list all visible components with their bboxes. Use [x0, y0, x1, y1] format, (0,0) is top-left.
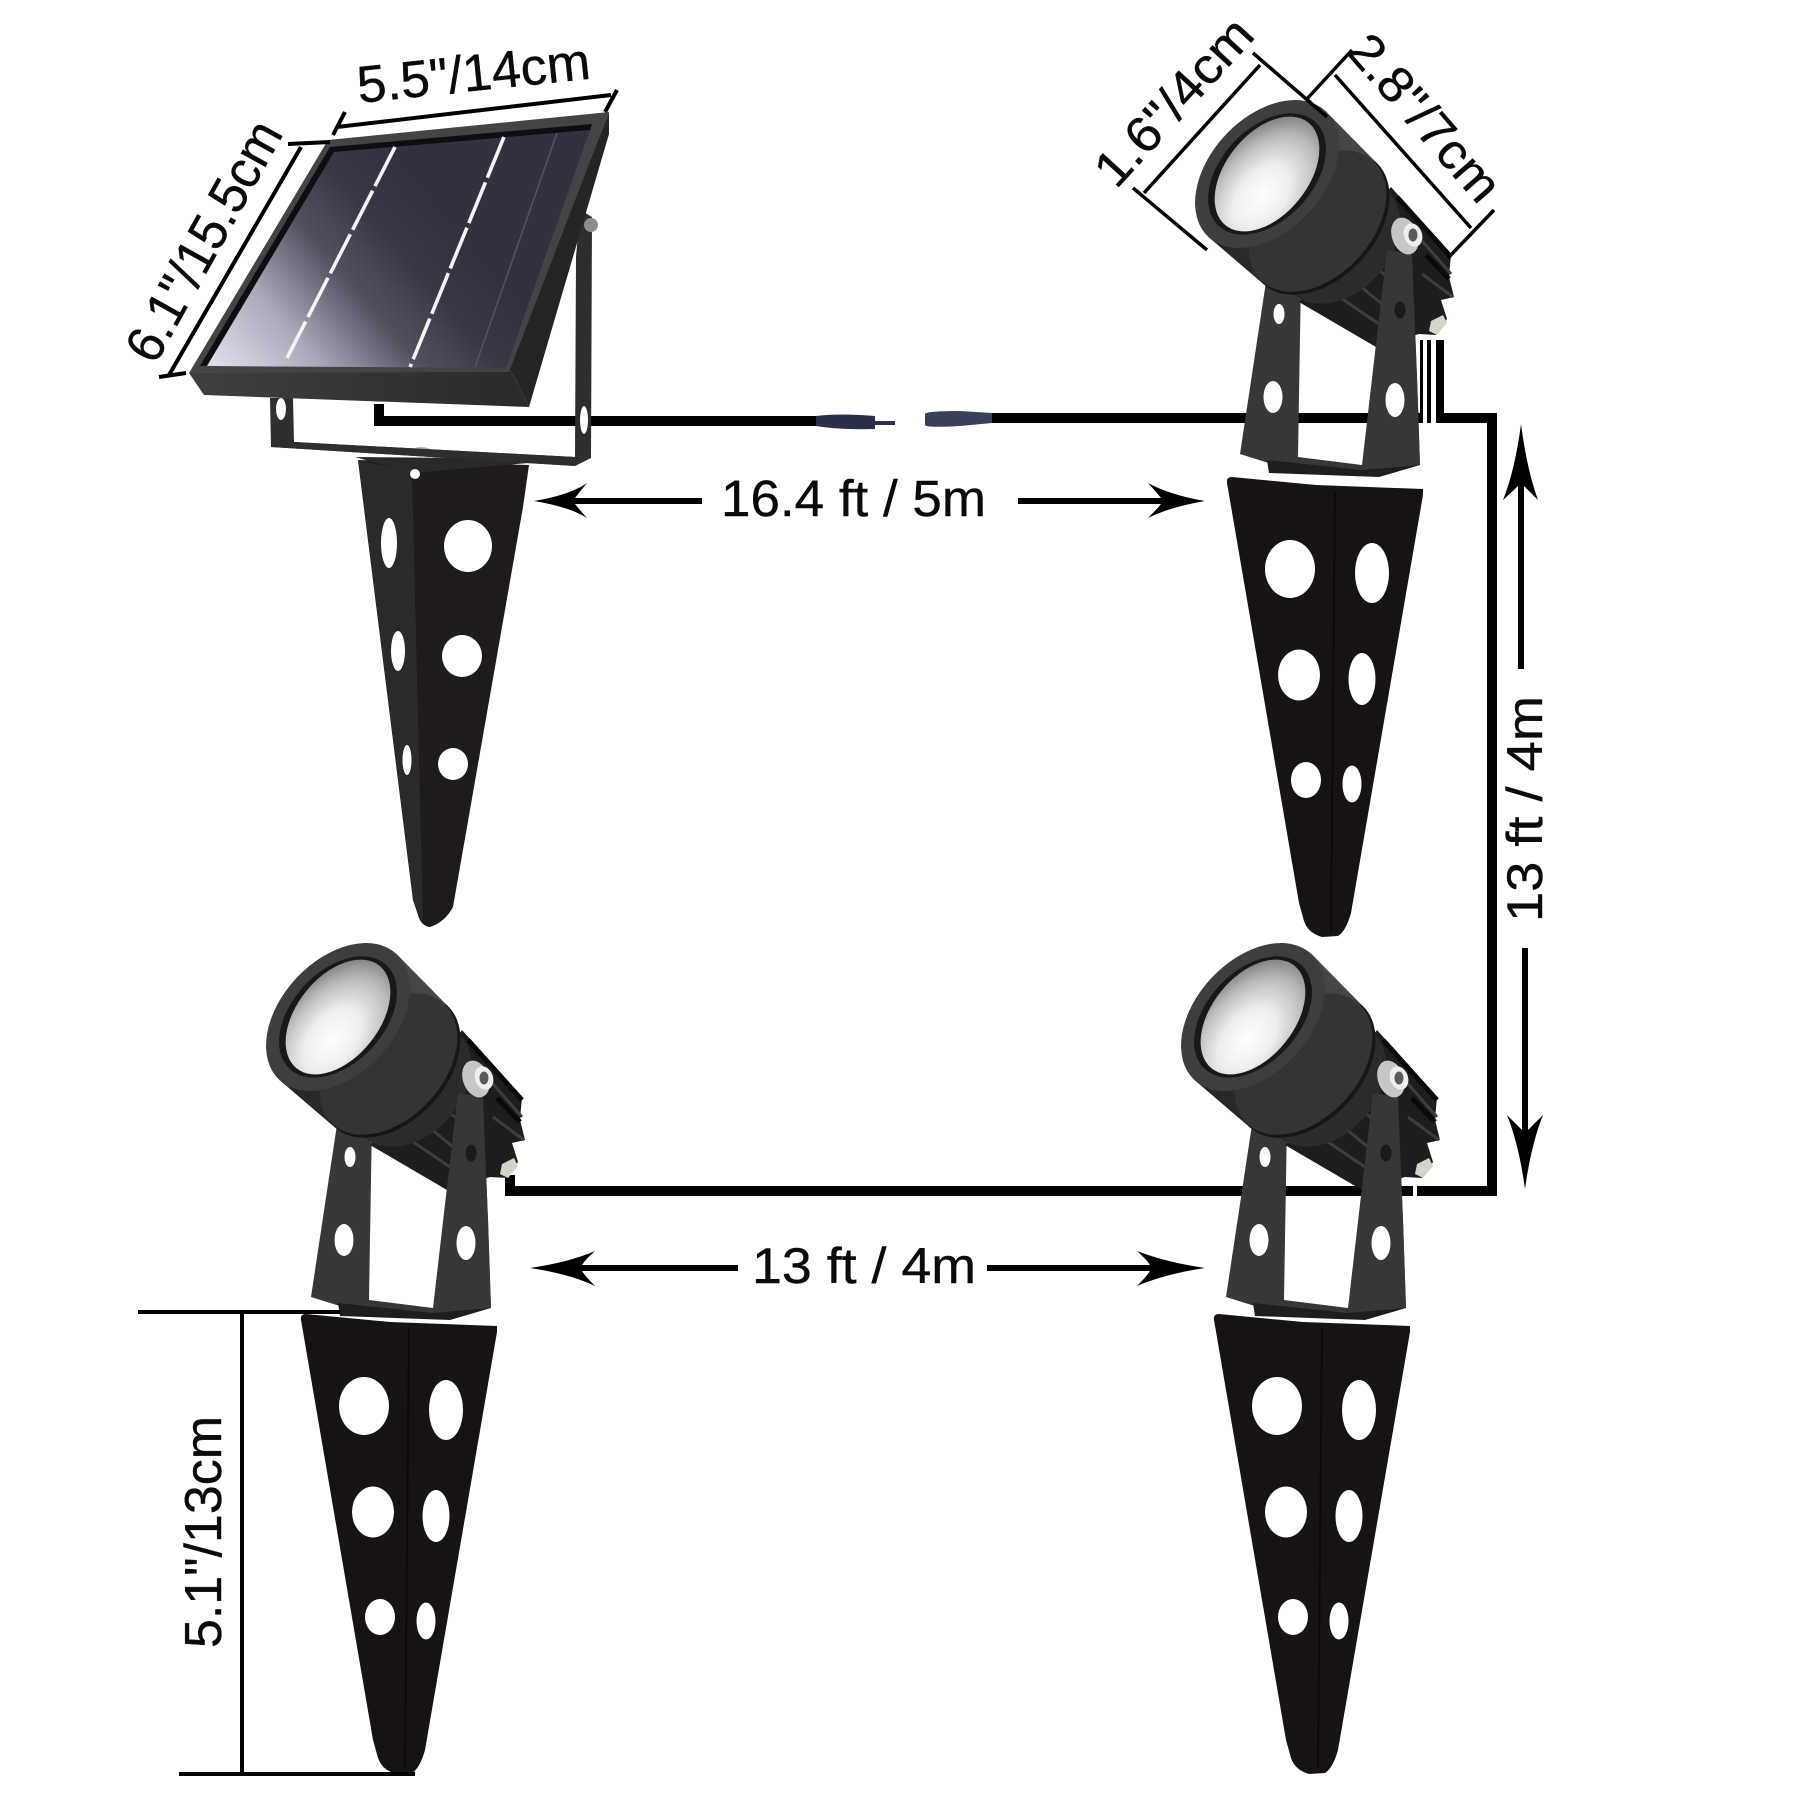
arrow and label: 13 ft horizontal span [530, 1238, 1205, 1294]
label: lamp length: 2.8"/7cm [1337, 22, 1513, 213]
wire: bottom run between lower lamps [505, 1175, 1413, 1196]
solar panel with bracket [189, 112, 609, 466]
bracket front band over stake [271, 440, 575, 466]
panel bracket [270, 210, 598, 466]
solar cell surface [200, 124, 592, 366]
stake: bottom right lamp [1214, 1314, 1410, 1774]
label: 13 ft / 4m horizontal: 13 ft / 4m [752, 1238, 976, 1294]
label: panel height: 6.1"/15.5cm [114, 111, 294, 372]
dimension: stake height [138, 1312, 415, 1774]
dimension: panel height [114, 111, 330, 377]
cell bus bars [287, 137, 504, 367]
wiring between lamps [374, 340, 1497, 1196]
label: 13 ft / 4m vertical: 13 ft / 4m [1497, 696, 1553, 922]
connector: left plug [816, 414, 895, 429]
lamp head: top right [1167, 72, 1454, 477]
connector: right plug [925, 411, 992, 427]
lamp head: bottom left [238, 915, 525, 1320]
arrow and label: 13 ft vertical span [1497, 424, 1553, 1189]
panel ground stake [355, 457, 575, 927]
panel side face [509, 112, 609, 407]
cell edge line [475, 133, 557, 367]
label: 16.4 ft / 5m: 16.4 ft / 5m [721, 470, 986, 527]
wire: first lamp risers [1420, 340, 1497, 423]
label: lamp diameter: 1.6"/4cm [1083, 6, 1265, 197]
panel frame [189, 112, 609, 373]
label: panel width: 5.5"/14cm [354, 33, 593, 115]
dimension: lamp diameter [1083, 6, 1327, 250]
wire: run down the right side [1417, 413, 1497, 1196]
wire: solar panel to connector [374, 404, 820, 426]
label: stake height: 5.1"/13cm [175, 1416, 233, 1648]
stake: top right lamp [1227, 477, 1423, 937]
lamp head: bottom right [1153, 915, 1440, 1320]
dimension: lamp length [1306, 22, 1513, 258]
dimension: panel width [333, 33, 617, 135]
panel front face [189, 368, 529, 407]
stake: bottom left lamp [301, 1314, 497, 1774]
arrow and label: 16.4 ft span [534, 470, 1205, 527]
wire: connector to first lamp [985, 413, 1420, 423]
